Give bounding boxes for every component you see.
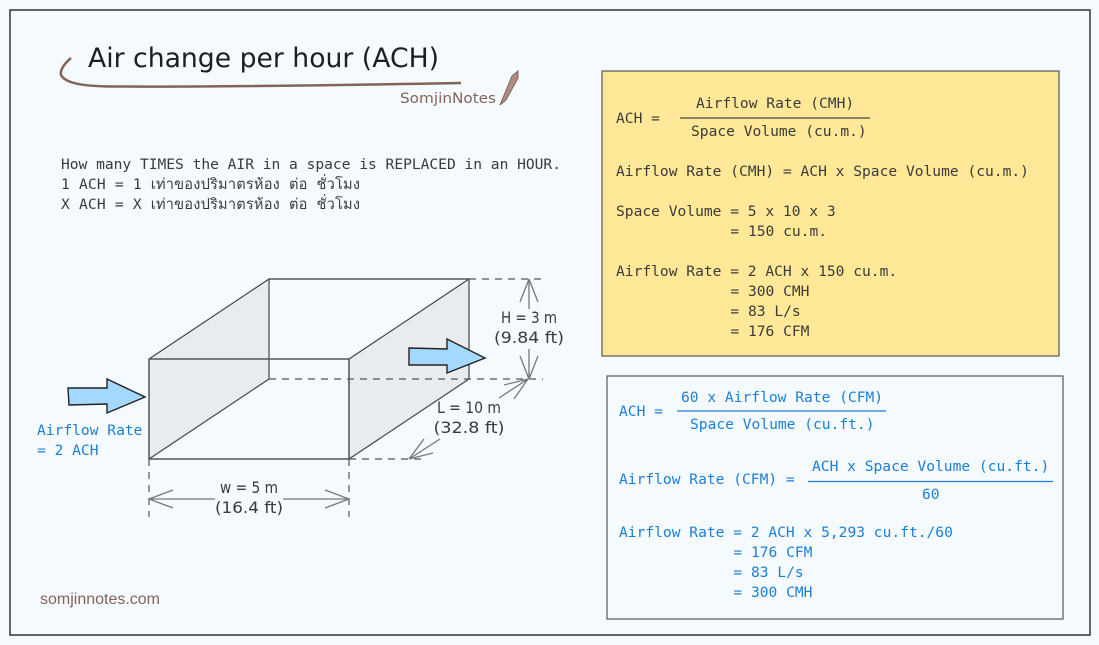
left wall [149, 279, 269, 459]
width label: (16.4 ft) [215, 498, 283, 517]
arrow: airflow out [409, 339, 485, 373]
brand name: SomjinNotes [400, 91, 496, 107]
width label: w = 5 m [220, 478, 278, 497]
panel: metric formulas: = 300 CMH [730, 283, 809, 300]
room edges [149, 279, 543, 517]
title block [61, 43, 518, 107]
panel: metric formulas: Space Volume = 5 x 10 x 3 [616, 203, 836, 220]
panel: imperial formulas: = 300 CMH [733, 584, 812, 601]
panel: imperial formulas: ACH x Space Volume (cu.ft.) [812, 458, 1049, 475]
dimension arrows [149, 279, 538, 508]
right wall [349, 279, 469, 459]
panel: imperial formulas [607, 376, 1063, 619]
panel: metric formulas: Airflow Rate = 2 ACH x 150 cu.m. [616, 263, 897, 280]
room diagram [37, 279, 564, 517]
length label [434, 398, 504, 437]
panel: metric formulas: = 150 cu.m. [730, 223, 827, 240]
title: Air change per hour (ACH) [88, 43, 439, 74]
height label: (9.84 ft) [494, 328, 564, 347]
panel: imperial formulas: Airflow Rate (CFM) = [619, 471, 795, 488]
airflow label: Airflow Rate [37, 422, 142, 439]
panel: imperial formulas: ACH = [619, 403, 663, 420]
panel: metric formulas: Space Volume (cu.m.) [691, 123, 867, 140]
panel: metric formulas: Airflow Rate (CMH) [696, 95, 854, 112]
airflow label: = 2 ACH [37, 442, 99, 459]
intro text: How many TIMES the AIR in a space is REPLACED in an HOUR. [61, 156, 561, 173]
panel: imperial formulas: 60 [922, 486, 940, 503]
height label: H = 3 m [501, 308, 557, 327]
icon: pen [500, 71, 518, 105]
panel: metric formulas: Airflow Rate (CMH) = ACH x Space Volume (cu.m.) [616, 163, 1029, 180]
intro text: X ACH = X เท่าของปริมาตรห้อง ต่อ ชั่วโมง [61, 194, 360, 213]
footer url: somjinnotes.com [40, 591, 160, 608]
panel: imperial formulas: = 83 L/s [733, 564, 804, 581]
airflow label [37, 422, 142, 459]
panel: metric formulas [602, 71, 1059, 356]
length label: (32.8 ft) [434, 418, 504, 437]
title underline [61, 58, 461, 87]
intro text: 1 ACH = 1 เท่าของปริมาตรห้อง ต่อ ชั่วโมง [61, 174, 360, 193]
width label [215, 478, 283, 517]
panel: imperial formulas: Airflow Rate = 2 ACH x 5,293 cu.ft./60 [619, 524, 953, 541]
intro text [61, 156, 561, 213]
height label [494, 308, 564, 347]
arrow: airflow in [68, 379, 145, 413]
panel: metric formulas: ACH = [616, 110, 660, 127]
panel: imperial formulas: 60 x Airflow Rate (CFM) [681, 389, 883, 406]
length label: L = 10 m [437, 398, 501, 417]
panel: imperial formulas: = 176 CFM [733, 544, 813, 561]
panel: metric formulas: = 83 L/s [730, 303, 801, 320]
panel: imperial formulas: Space Volume (cu.ft.) [690, 416, 875, 433]
panel: metric formulas: = 176 CFM [730, 323, 810, 340]
